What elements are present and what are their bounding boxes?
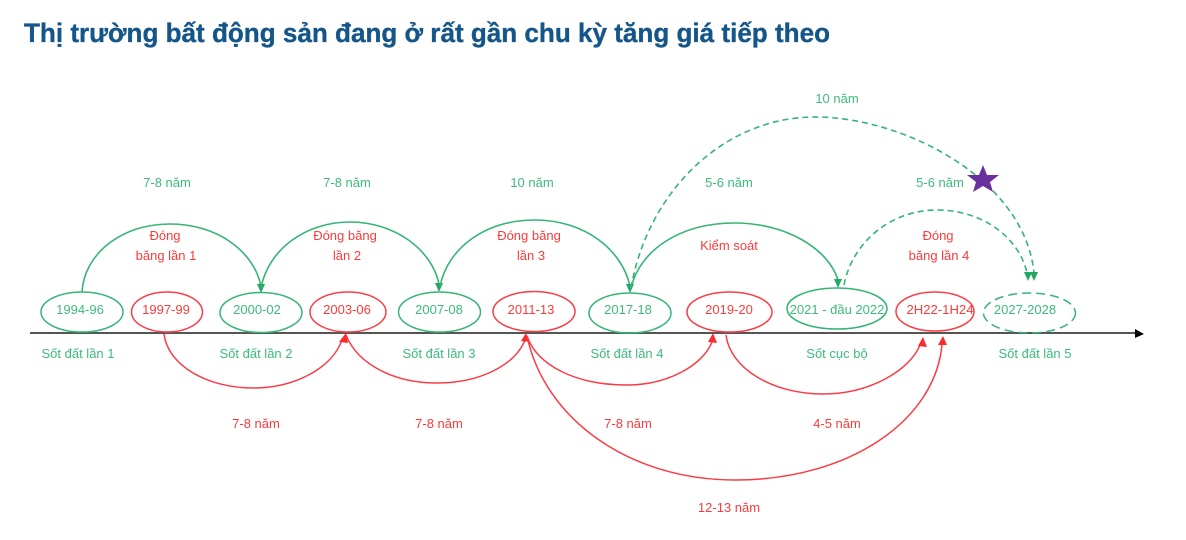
red freeze labels: băng lần 1 — [136, 248, 196, 263]
oval: 2027-2028: 2027-2028 — [994, 302, 1056, 317]
dashed arc: 2021 to 2027-2028 — [844, 210, 1032, 285]
red freeze labels: Đóng băng — [497, 228, 561, 243]
oval: 2007-08 — [398, 292, 480, 332]
green duration labels: 5-6 năm — [916, 175, 964, 190]
green duration labels: 10 năm — [510, 175, 554, 190]
red duration labels: 7-8 năm — [415, 416, 463, 431]
dashed arc: 2017-18 to 2027-2028 — [631, 117, 1038, 288]
red duration labels: 7-8 năm — [604, 416, 652, 431]
arc: 1997-99 to 2003-06 — [164, 333, 348, 388]
red duration labels: 12-13 năm — [698, 500, 760, 515]
red duration labels: 7-8 năm — [232, 416, 280, 431]
red duration labels — [232, 416, 861, 515]
oval: 2003-06 — [310, 292, 386, 332]
arc: 1994-96 to 2000-02 — [82, 224, 265, 293]
oval: 2019-20 — [687, 292, 772, 332]
red arcs: freeze cycles — [164, 333, 947, 480]
oval: 2021 - dau 2022 — [787, 288, 887, 329]
red freeze labels: lần 3 — [517, 248, 545, 263]
land fever labels: Sốt đất lần 5 — [998, 346, 1072, 361]
red freeze labels — [136, 228, 969, 263]
timeline axis arrow — [30, 329, 1144, 338]
oval: 2017-18: 2017-18 — [604, 302, 652, 317]
oval: 2H22-1H24 — [896, 292, 974, 331]
oval: 2011-13: 2011-13 — [508, 302, 554, 317]
oval: 1997-99 — [132, 292, 202, 332]
title: Thị trường bất động sản đang ở rất gần chu kỳ tăng giá tiếp theo — [24, 18, 830, 48]
oval: 2000-02 — [220, 292, 302, 332]
arc: 2003-06 to 2011-13 — [346, 333, 530, 383]
oval: 2019-20: 2019-20 — [705, 302, 753, 317]
green duration labels: 10 năm — [815, 91, 859, 106]
icon: purple star — [967, 165, 999, 192]
oval: 2021 - dau 2022: 2021 - đầu 2022 — [790, 302, 884, 317]
red freeze labels: lần 2 — [333, 248, 361, 263]
oval: 2011-13 — [493, 292, 575, 332]
red freeze labels: Kiểm soát — [700, 238, 758, 253]
green duration labels: 7-8 năm — [143, 175, 191, 190]
red freeze labels: băng lần 4 — [909, 248, 969, 263]
arc: 2007-08 to 2017-18 — [440, 220, 634, 293]
arc: 2017-18 to 2021 — [631, 223, 842, 288]
red freeze labels: Đóng — [149, 228, 181, 243]
oval: 1994-96: 1994-96 — [56, 302, 104, 317]
land fever labels: Sốt cục bộ — [806, 346, 868, 361]
oval: 2000-02: 2000-02 — [233, 302, 281, 317]
arc: 2011-13 to 2019-20 — [527, 333, 717, 385]
green arcs: land fever cycles — [82, 117, 1038, 293]
red freeze labels: Đóng băng — [313, 228, 377, 243]
arc: 2019-20 to 2H22-1H24 — [726, 335, 927, 394]
red freeze labels: Đóng — [922, 228, 954, 243]
oval: 2003-06: 2003-06 — [323, 302, 371, 317]
oval: 2007-08: 2007-08 — [415, 302, 463, 317]
oval: 1997-99: 1997-99 — [142, 302, 190, 317]
land fever labels: Sốt đất lần 4 — [590, 346, 664, 361]
period ovals — [41, 288, 1076, 333]
oval: 2027-2028 — [984, 293, 1076, 333]
green duration labels — [143, 91, 964, 190]
land fever labels: Sốt đất lần 3 — [402, 346, 476, 361]
oval: 2H22-1H24: 2H22-1H24 — [906, 302, 974, 317]
oval: 2017-18 — [589, 293, 671, 333]
red duration labels: 4-5 năm — [813, 416, 861, 431]
arc: 2000-02 to 2007-08 — [261, 222, 443, 292]
green duration labels: 7-8 năm — [323, 175, 371, 190]
green duration labels: 5-6 năm — [705, 175, 753, 190]
land fever labels: Sốt đất lần 1 — [42, 346, 114, 361]
oval: 1994-96 — [41, 292, 123, 332]
arc: 2011-13 to 2H22-1H24 long — [527, 336, 947, 480]
land fever labels: Sốt đất lần 2 — [220, 346, 292, 361]
land fever labels — [42, 346, 1072, 361]
